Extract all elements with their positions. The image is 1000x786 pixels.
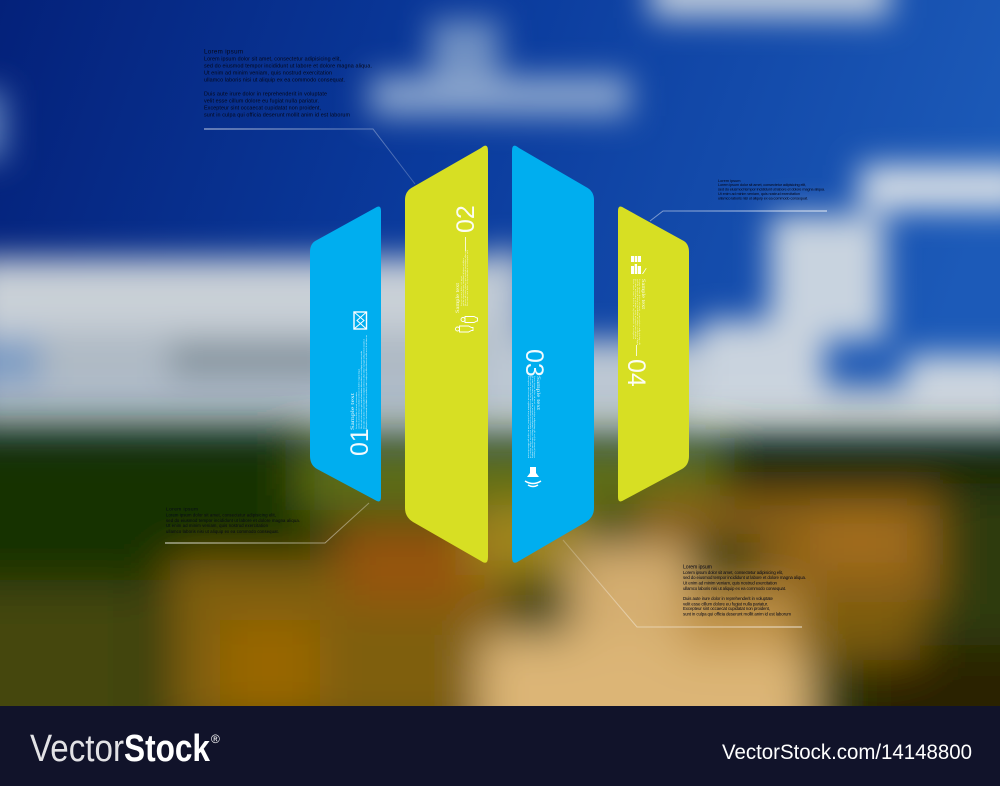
icon: two figures [456,316,478,332]
footer bar [0,706,1000,786]
logo: VectorStock: Stock [124,728,211,770]
body text 02: sed do eiusmod tempor incididunt ut labore et dolore [462,257,465,306]
icon: envelope [354,312,366,329]
body text 03: Excepteur sint occaecat cupidatat non proident, sunt in culpa qui officia deserunt [527,376,530,458]
body text 01: Duis aute irure dolor in reprehenderit in voluptate velit esse cillum dolore eu fugiat nulla pariatur excepteur [362,339,366,429]
icon: bar chart [631,256,646,274]
body text 01 [355,335,368,429]
body text 01: sed do eiusmod tempor incididunt ut labore et dolore magna aliqua [358,368,360,429]
text block: bottom right: Ut enim ad minim veniam, quis nostrud exercitation [683,580,778,586]
text block: bottom right: Excepteur sint occaecat cupidatat non proident, [683,606,770,611]
sample text 04: Sample text [640,279,646,310]
leader line: top left [204,129,415,184]
text block: bottom left [166,506,300,534]
text block: top right: Lorem ipsum [718,178,740,183]
body text 03: Duis aute irure dolor in reprehenderit in voluptate velit esse cillum dolore eu [529,376,532,458]
text block: top right: Ut enim ad minim veniam, quis nostrud exercitation [718,191,800,196]
body text 03 [527,376,536,459]
text block: top left: ullamco laboris nisi ut aliquip ex ea commodo consequat. [204,78,345,84]
body text 02: Ut enim ad minim veniam, quis nostrud exercitation ullamco [464,250,467,306]
sample text 01: Sample text [350,392,356,430]
body text 02: Duis aute irure dolor in reprehenderit in voluptate velit [466,250,469,306]
text block: bottom right: Duis aute irure dolor in reprehenderit in voluptate [683,596,774,601]
body text 04: Lorem ipsum dolor sit amet, consectetur adipisicing elit [638,279,641,345]
text block: bottom right: velit esse cillum dolore eu fugiat nulla pariatur. [683,602,768,606]
panel 02: green bar [405,146,488,563]
text block: bottom right: sunt in culpa qui officia deserunt mollit anim id est laborum [683,612,791,616]
text block: top left: Lorem ipsum [204,48,243,56]
source url: VectorStock.com/14148800 [722,740,972,764]
panel 04: green right bar [618,207,689,501]
text block: bottom right [683,564,806,616]
text block: bottom right: Lorem ipsum [683,564,712,570]
number 02: 02 [452,205,480,233]
text block: top left [204,48,372,118]
text block: top left: sunt in culpa qui officia deserunt mollit anim id est laborum [204,112,350,118]
text block: top left: Excepteur sint occaecat cupidatat non proident, [204,106,322,112]
rule 02 [464,237,467,251]
text block: top left: Duis aute irure dolor in reprehenderit in voluptate [204,92,327,98]
text block: top left: Lorem ipsum dolor sit amet, consectetur adipisicing elit, [204,56,342,62]
body text 04: Duis aute irure dolor in reprehenderit in voluptate [632,279,635,340]
text block: top right: sed do eiusmod tempor incididunt ut labore et dolore magna aliqua. [718,186,825,192]
text block: top left: velit esse cillum dolore eu fugiat nulla pariatur. [204,98,319,104]
text block: bottom left: Lorem ipsum [166,506,198,512]
leader line: bottom left [165,503,369,543]
body text 03: Ut enim ad minim veniam, quis nostrud exercitation ullamco laboris nisi ut aliquip [531,376,534,459]
sample text 02: Sample text [455,282,461,313]
text block: bottom left: Lorem ipsum dolor sit amet, consectetur adipisicing elit, [166,512,276,518]
logo: VectorStock [30,728,220,770]
text block: bottom left: sed do eiusmod tempor incididunt ut labore et dolore magna aliqua. [166,518,300,523]
body text 02 [460,250,469,306]
body text 04: sed do eiusmod tempor incididunt ut labore et dolore magna [636,279,639,346]
logo: VectorStock: Vector [30,728,124,770]
text block: top left: sed do eiusmod tempor incididunt ut labore et dolore magna aliqua. [204,64,372,70]
text block: top right [718,178,825,200]
panel 03: blue bar [512,146,594,563]
icon: bell with waves [525,467,541,486]
text block: bottom right: sed do eiusmod tempor incididunt ut labore et dolore magna aliqua. [683,575,806,580]
rule 04 [635,345,638,356]
number 03: 03 [520,349,548,377]
text block: top left: Ut enim ad minim veniam, quis nostrud exercitation [204,70,332,76]
panel 01: blue left bar [310,207,381,501]
body text 04 [632,279,641,346]
leader line: top right [650,211,827,221]
text block: bottom left: Ut enim ad minim veniam, quis nostrud exercitation [166,523,269,528]
text block: bottom right: ullamco laboris nisi ut aliquip ex ea commodo consequat. [683,586,786,591]
text block: top right: Lorem ipsum dolor sit amet, consectetur adipisicing elit, [718,182,806,187]
logo: VectorStock: ® [211,732,220,746]
sample text 03: Sample text [535,376,541,411]
number 04: 04 [622,359,650,387]
text block: top right: ullamco laboris nisi ut aliquip ex ea commodo consequat. [718,196,808,200]
body text 04: Ut enim ad minim veniam, quis nostrud exercitation [634,279,637,339]
text block: bottom right: Lorem ipsum dolor sit amet, consectetur adipisicing elit, [683,570,783,575]
body text 01: Lorem ipsum dolor sit amet, consectetur [355,392,358,429]
leader line: bottom right [563,540,802,627]
number 01: 01 [346,428,374,456]
body text 02: Lorem ipsum dolor sit amet [460,276,463,306]
text block: bottom left: ullamco laboris nisi ut aliquip ex ea commodo consequat. [166,529,279,534]
body text 01: Ut enim ad minim veniam, quis nostrud exercitation ullamco laboris nisi ut aliquip ex ea commodo [360,350,363,429]
body text 03: Lorem ipsum dolor sit amet, consectetur adipisicing elit, sed do eiusmod tempor [533,376,536,458]
body text 01: Excepteur sint occaecat cupidatat non proident, sunt in culpa qui officia deserunt mollit anim id est laborum [365,335,368,429]
